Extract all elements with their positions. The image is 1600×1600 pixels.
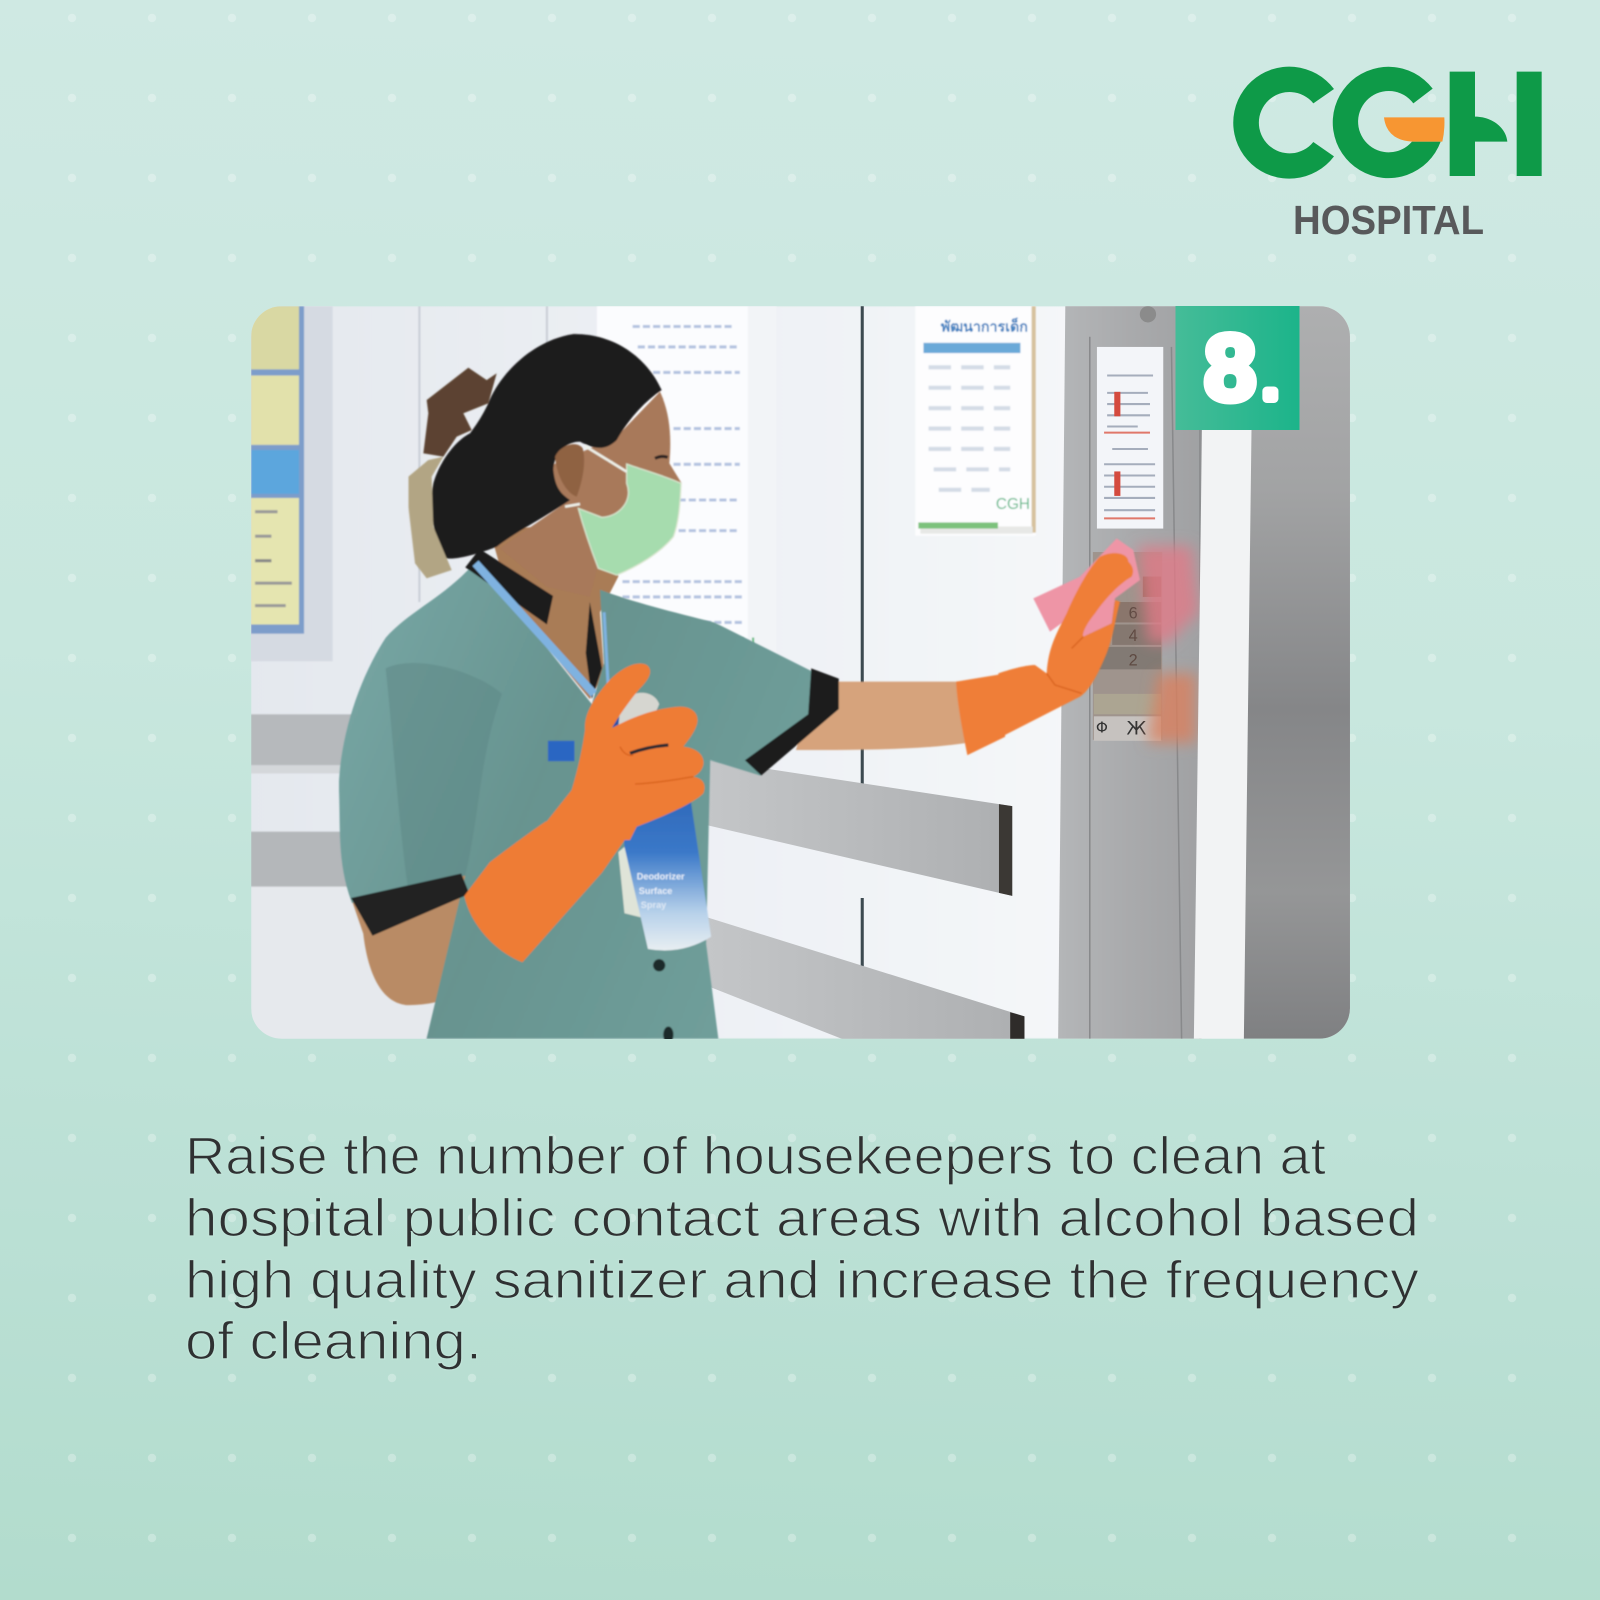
spray can: Deodorizer <box>637 872 685 882</box>
badge number: . <box>1264 354 1277 410</box>
lift keypad <box>1093 552 1162 741</box>
ear <box>555 444 584 497</box>
white wall strip and lift door <box>1194 306 1350 1039</box>
hair clip <box>423 368 497 457</box>
lift instruction sign <box>1097 347 1163 529</box>
collar <box>465 549 553 624</box>
lift control panel <box>1058 306 1202 1039</box>
notice board on left <box>245 306 333 661</box>
uniform shading <box>386 663 502 890</box>
lift keypad: 2 <box>1129 651 1138 669</box>
body text <box>185 1127 1420 1371</box>
left glove forearm <box>464 821 638 962</box>
photo background: corridor wall <box>251 306 1350 1040</box>
logo wordmark: HOSPITAL <box>1293 197 1484 243</box>
right sleeve cuff <box>745 668 839 776</box>
right glove cuff <box>956 673 1005 755</box>
eye <box>655 456 668 458</box>
left arm skin <box>352 874 466 1006</box>
left glove hand <box>540 664 705 840</box>
spray can: Spray <box>641 900 667 910</box>
wall rails <box>704 759 1024 1041</box>
poster behind head <box>597 306 777 663</box>
body text: hospital public contact areas with alcohol based <box>185 1189 1419 1248</box>
hair ornament <box>408 457 452 578</box>
body text: Raise the number of housekeepers to clean at <box>185 1127 1326 1186</box>
head <box>408 334 682 597</box>
poster behind head: CGH <box>706 633 756 658</box>
badge number: 8 <box>1204 315 1256 420</box>
body text: high quality sanitizer and increase the frequency <box>185 1251 1420 1310</box>
mask straps <box>565 446 627 507</box>
woman <box>339 334 1140 1043</box>
cleaning cloth <box>1033 538 1140 637</box>
lift keypad: Ж <box>1127 719 1147 740</box>
lift keypad: Φ <box>1096 719 1108 737</box>
buttons <box>653 959 673 1043</box>
spray can <box>612 693 711 951</box>
right arm skin <box>796 682 967 750</box>
mask <box>578 464 681 575</box>
spray can: Surface <box>639 886 672 896</box>
chest logo <box>548 741 574 761</box>
face <box>530 391 682 528</box>
lift keypad: 4 <box>1129 627 1138 645</box>
wall poster right <box>915 306 1036 536</box>
body text: of cleaning. <box>185 1312 482 1371</box>
right glove hand <box>998 553 1133 738</box>
logo: CGH Hospital <box>1233 67 1542 243</box>
motion blur smear <box>1138 546 1199 743</box>
uniform <box>339 566 839 1039</box>
photo: housekeeper cleaning lift buttons <box>245 306 1350 1043</box>
neck <box>490 520 618 699</box>
hair <box>431 334 662 559</box>
number badge <box>1176 306 1300 430</box>
lift keypad: 6 <box>1129 604 1138 622</box>
wall poster right: พัฒนาการเด็ก <box>941 316 1028 337</box>
logo mark <box>1233 67 1542 179</box>
left sleeve cuff <box>351 873 469 936</box>
door seam <box>861 306 864 974</box>
lanyard <box>476 563 594 694</box>
wall poster right: CGH <box>996 496 1030 513</box>
